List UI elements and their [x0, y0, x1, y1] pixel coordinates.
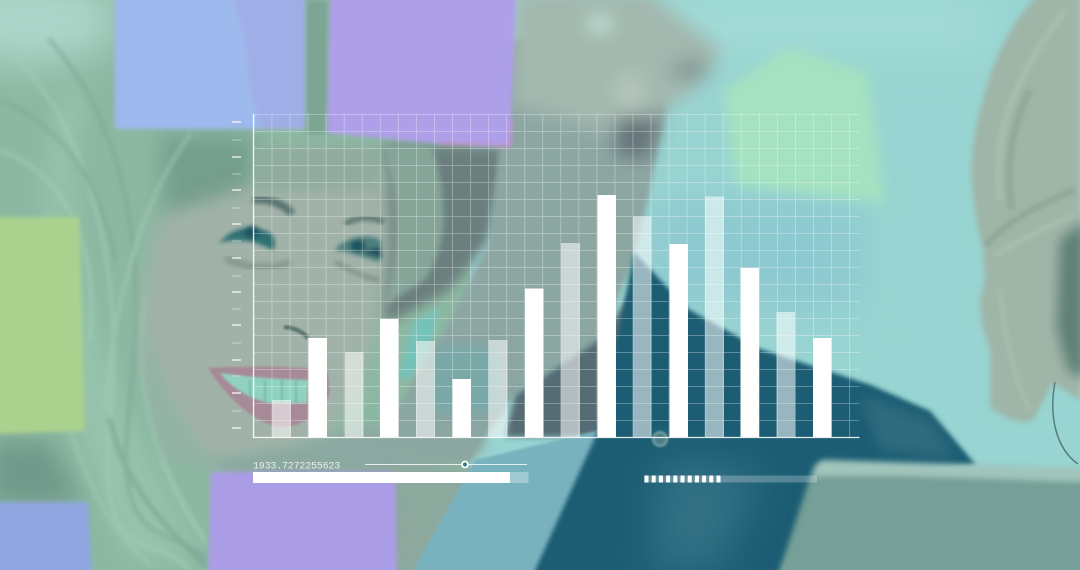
translucent bars	[272, 196, 795, 437]
left woman facial features	[208, 200, 384, 427]
forehead tint	[255, 145, 380, 190]
sticky note: blue bottom left	[0, 502, 92, 570]
progress bar left	[253, 472, 528, 483]
area beside shirt	[385, 470, 480, 570]
sticky note: purple bottom	[208, 472, 397, 570]
right brow	[345, 218, 384, 224]
dashed progress bar right	[644, 476, 817, 482]
crows feet shadow	[225, 258, 290, 268]
hand	[510, 0, 722, 160]
chart axes	[254, 114, 860, 438]
light blue shirt	[410, 430, 600, 570]
hair over forehead	[383, 145, 444, 305]
chart grid	[253, 114, 860, 438]
tablet	[778, 460, 1080, 570]
left brow	[253, 200, 292, 214]
y axis ticks	[232, 122, 241, 428]
raised arm	[380, 40, 665, 460]
sticky note: purple top	[327, 0, 516, 146]
nose shadow	[284, 327, 308, 338]
wall shading	[650, 0, 990, 310]
teal gap beside chin	[398, 308, 440, 378]
slider	[365, 462, 527, 468]
sticky note: yellow-green left	[0, 217, 85, 434]
face	[143, 160, 389, 465]
right eye	[334, 236, 382, 262]
dark hair behind face	[380, 145, 510, 320]
mouth	[208, 367, 330, 427]
left eye	[219, 226, 275, 250]
dark jacket	[533, 252, 976, 570]
dark shadow under arm	[505, 290, 632, 437]
neck and chin shadow	[205, 425, 490, 570]
cheek shade	[146, 330, 220, 465]
left woman hair	[0, 0, 470, 570]
teeth gaps	[250, 380, 296, 403]
sticky note: green blurred	[723, 47, 885, 204]
sticky note: blue top	[115, 0, 305, 129]
numeric readout: 1933.7272255623	[253, 462, 340, 472]
white bars	[308, 195, 832, 437]
eye bag shadow	[335, 262, 380, 280]
right woman hair	[971, 0, 1080, 464]
